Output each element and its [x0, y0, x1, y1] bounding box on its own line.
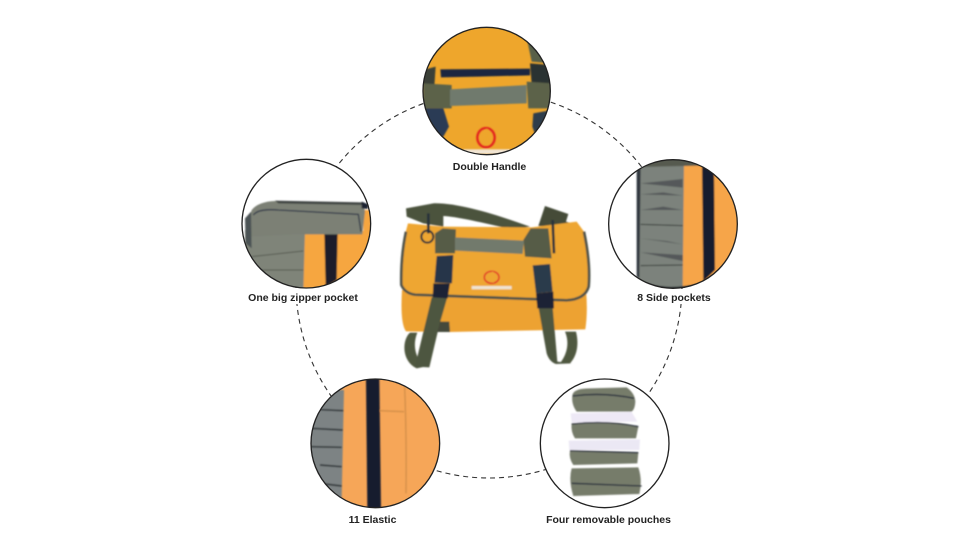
buckles: [424, 108, 449, 137]
pouch 1: [572, 387, 635, 412]
pouch 3: [569, 439, 640, 450]
buckles: [434, 255, 453, 283]
label: 11 elastic: [343, 511, 403, 526]
lower pockets: [245, 230, 305, 292]
clips: [421, 231, 433, 243]
pouch 2: [571, 412, 637, 423]
logo: [484, 271, 499, 283]
flap: [401, 222, 589, 300]
label: one big zipper pocket: One big zipper pocket: [248, 292, 358, 304]
circle: four removable pouches detail: [540, 379, 669, 508]
logo: [477, 128, 495, 147]
label: 11 elastic: 11 Elastic: [349, 514, 397, 526]
pocket creases: [641, 179, 683, 261]
handle: [423, 83, 452, 108]
upper side straps: [526, 42, 543, 64]
pouch 4: [570, 467, 641, 496]
dashed connecting ring: [296, 92, 682, 478]
lower strap loops: [404, 333, 425, 368]
front straps: [415, 297, 447, 367]
roll body: [401, 290, 587, 332]
zipper pouch: [250, 201, 365, 237]
circle: 8 side pockets detail: [609, 159, 740, 292]
label: double handle: Double Handle: [453, 161, 526, 173]
handle: [455, 237, 524, 254]
circle: double handle detail: [423, 27, 552, 155]
flap piping: [401, 232, 589, 300]
central bag photo: [401, 203, 589, 368]
circle: one big zipper pocket detail: [242, 159, 375, 292]
shoulder strap: [406, 203, 530, 229]
label: four removable pouches: Four removable pouches: [546, 514, 671, 526]
zipper: [440, 69, 530, 77]
circle: 11 elastic detail: [307, 378, 440, 508]
label: 8 side pockets: 8 Side pockets: [637, 292, 711, 304]
infographic: bag feature diagram: [241, 26, 738, 525]
